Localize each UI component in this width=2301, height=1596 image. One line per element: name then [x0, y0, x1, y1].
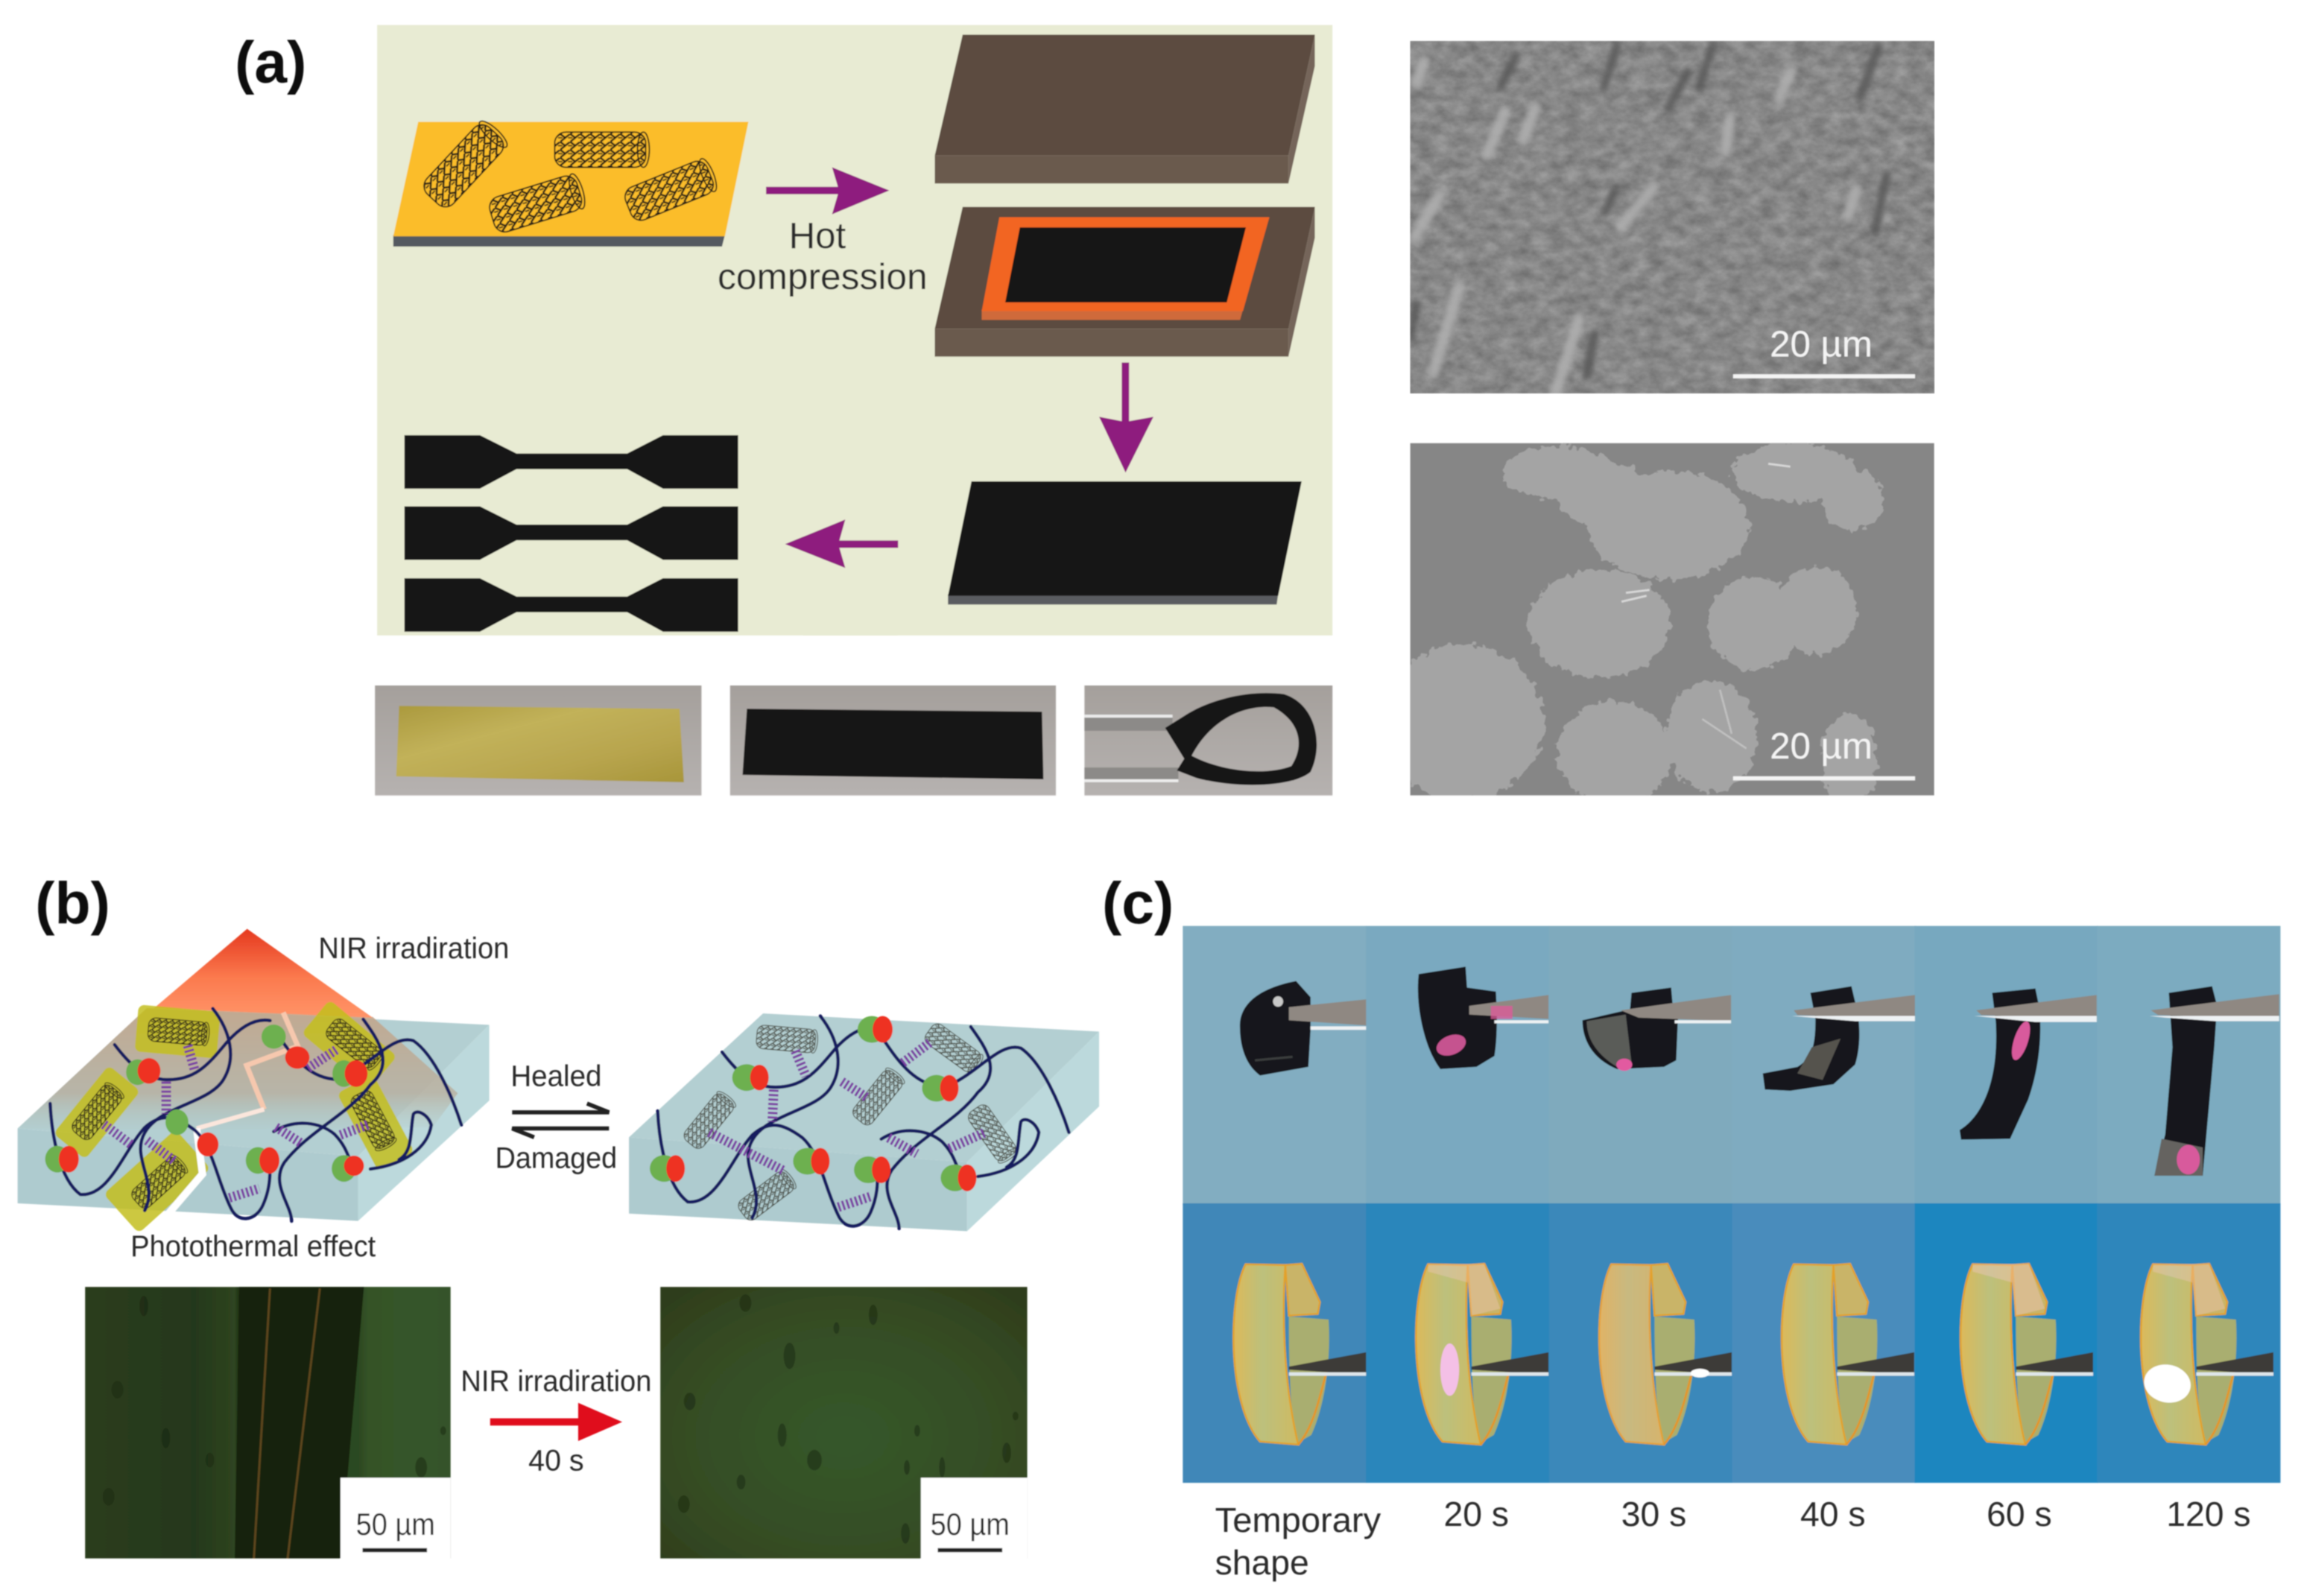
lower mold with sample [934, 207, 1315, 357]
black composite sheet [948, 481, 1302, 604]
NIR irradiation label: NIR irradiration [318, 932, 509, 965]
Hot compression label [718, 215, 928, 297]
hydrogen-bond springs [104, 1045, 369, 1198]
polymer chains [650, 1016, 1069, 1229]
black composite recovery sequence [1233, 966, 2279, 1445]
panel: fabrication schematic [377, 25, 1332, 636]
time labels: 20 s [1443, 1495, 1509, 1533]
micrograph: scratched film [85, 1287, 451, 1560]
micrograph: healed film [660, 1287, 1028, 1560]
temporary shape [1240, 981, 1366, 1076]
ring: 120 s [2140, 1264, 2273, 1445]
crosslink dots [45, 1025, 367, 1182]
40 s [1763, 987, 1915, 1091]
scale inset [341, 1478, 451, 1560]
yellow neat polymer recovery sequence [1233, 1264, 2273, 1445]
SEM image: neat film surface [1411, 41, 1934, 393]
ring: 20 s [1416, 1264, 1548, 1445]
photo: black film [730, 685, 1056, 795]
hydrogen-bond springs [709, 1042, 985, 1207]
ring: temporary [1233, 1264, 1366, 1445]
scale bar: 20 µm [1770, 726, 1873, 767]
time labels: 120 s [2166, 1495, 2251, 1533]
panel a label: (a) [235, 29, 306, 95]
bottom row backgrounds [1183, 1203, 2280, 1483]
NIR beam [154, 929, 373, 1018]
arrow: NIR irradiation 40 s [460, 1365, 651, 1477]
arrow: NIR irradiation 40 s: NIR irradiration [460, 1365, 651, 1398]
panel b label: (b) [35, 870, 110, 936]
panel c label: (c) [1102, 870, 1174, 936]
photothermal label: Photothermal effect [130, 1230, 376, 1263]
60 s [1960, 989, 2097, 1139]
photo: gold film [375, 685, 701, 795]
time labels: Temporary [1215, 1501, 1381, 1539]
20 s [1418, 966, 1548, 1069]
arrow left [785, 519, 898, 568]
ring: 30 s [1599, 1264, 1732, 1445]
ring: 60 s [1960, 1264, 2093, 1445]
time labels: 60 s [1987, 1495, 2052, 1533]
Hot compression label: Hot [789, 215, 846, 256]
SEM image: phase-separated domains [1382, 443, 1934, 807]
crosslink dots [650, 1016, 976, 1191]
equilibrium arrows: Healed [510, 1060, 601, 1092]
yellow film with nanotubes [393, 118, 748, 247]
scale inset: 50 µm [931, 1507, 1010, 1542]
scale bar [1733, 324, 1915, 379]
equilibrium arrows [496, 1060, 617, 1175]
30 s [1583, 987, 1731, 1071]
diagram: healed network [629, 1013, 1099, 1231]
Hot compression label: compression [718, 256, 928, 297]
photothermal tint on slab [18, 1008, 458, 1130]
scale bar: 20 µm [1770, 324, 1873, 365]
dogbone specimens [405, 435, 738, 632]
heated halos [53, 1000, 414, 1233]
scale inset: 50 µm [356, 1507, 435, 1542]
nanotubes [681, 1021, 1020, 1223]
panel: shape recovery photo series [1183, 926, 2280, 1582]
diagram: damaged network under NIR [18, 929, 490, 1233]
time labels: 40 s [1800, 1495, 1865, 1533]
scale bar [1733, 726, 1915, 780]
arrow: NIR irradiation 40 s: 40 s [528, 1444, 584, 1477]
ring: 40 s [1782, 1264, 1914, 1445]
top row backgrounds [1183, 926, 2280, 1205]
120 s [2149, 987, 2279, 1176]
photo: bent film in tweezers [1084, 685, 1332, 795]
crack [168, 1013, 298, 1215]
time labels: 30 s [1621, 1495, 1686, 1533]
slab [629, 1013, 1099, 1231]
arrow down [1099, 362, 1153, 472]
scale inset [921, 1478, 1028, 1560]
equilibrium arrows: Damaged [496, 1142, 617, 1175]
arrow to mold [766, 168, 889, 215]
nanotubes [69, 1016, 398, 1211]
time labels [1215, 1495, 2251, 1582]
time labels: shape [1215, 1543, 1309, 1582]
polymer chains [45, 1009, 461, 1221]
upper mold plate [934, 35, 1315, 183]
slab [18, 1008, 490, 1221]
